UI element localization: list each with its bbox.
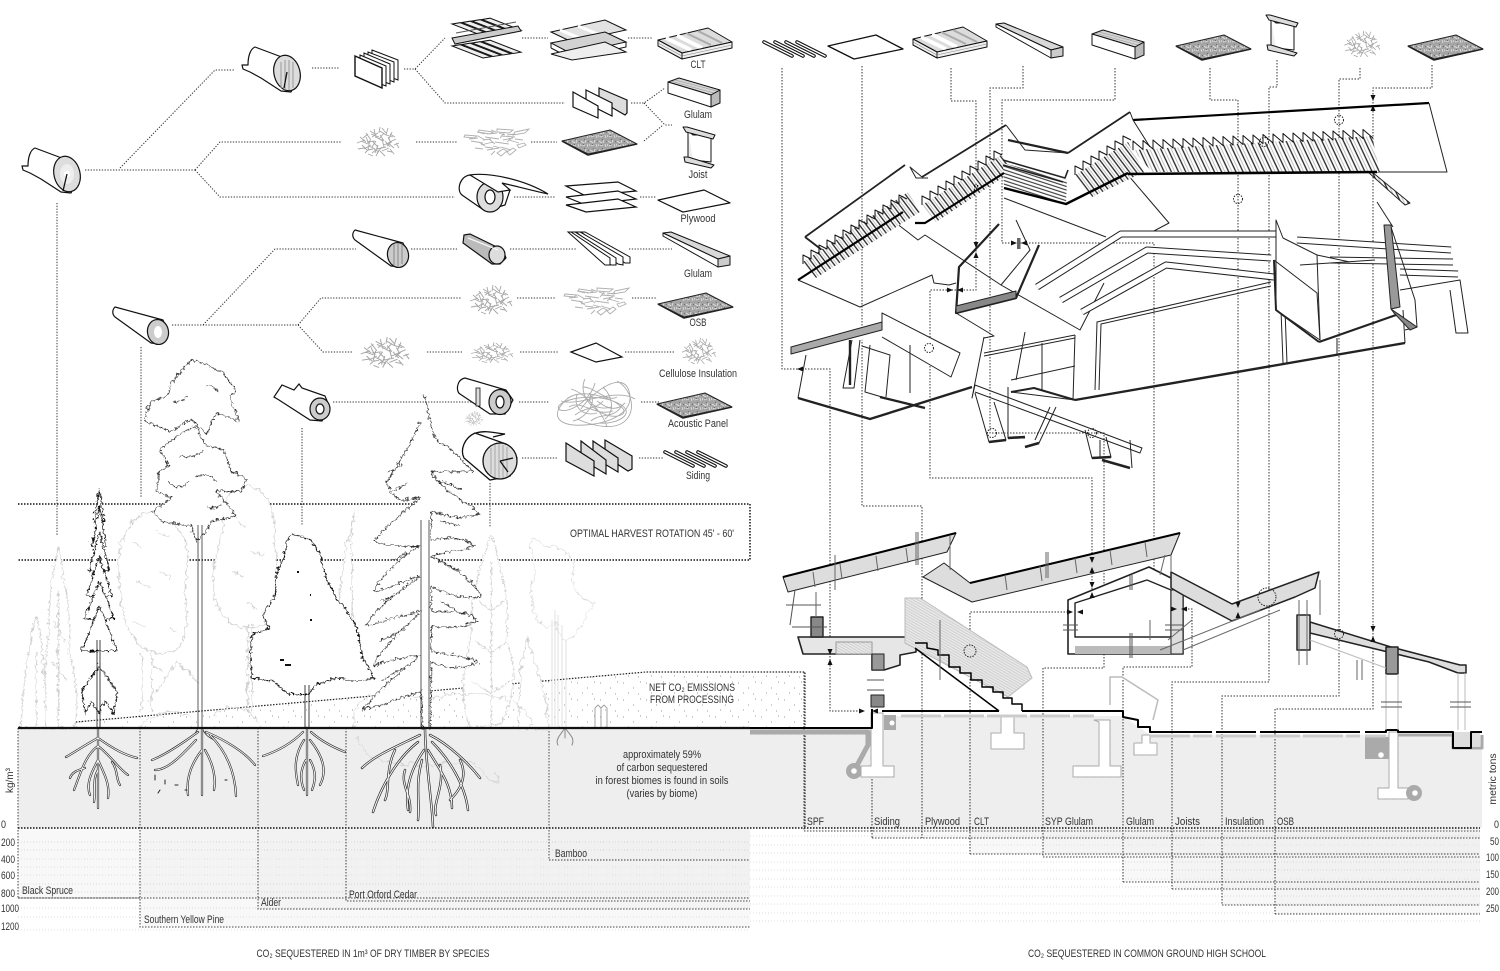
chart: CO2 sequestered by species [1,728,750,933]
material labels: SYP Glulam [1045,816,1093,828]
shrubs [135,692,530,781]
icon: log D [113,307,171,346]
tree: Southern Yellow Pine [143,359,245,740]
icon: CLT panel [658,28,732,59]
soil band [18,716,1482,828]
icon: siding strips [665,452,726,466]
y axis: metric tons [1487,753,1499,805]
detail markers [964,588,1344,657]
icon: plywood [828,35,903,59]
icon: glulam block [668,78,720,107]
icon: cellulose [682,338,716,364]
vertical members [816,535,1362,680]
tree: faint spruces [20,545,75,727]
roof deck top [805,103,1447,250]
stair [915,643,1022,711]
icon: log F [457,378,513,414]
species labels: Southern Yellow Pine [144,914,224,926]
icon: long glulam [663,232,730,267]
icon: siding boards [566,440,632,476]
y axis: 200 [1,837,15,849]
entry canopy [1110,677,1158,720]
y axis: 0 [1,819,6,831]
roots: bamboo [557,728,573,745]
label: Glulam: Glulam [684,268,712,280]
background trees [20,484,607,781]
flow lines: materials to building [782,60,1432,914]
stair and braces [975,385,1142,468]
icon: OSB sheet [562,130,637,155]
icon: joist [1266,15,1298,56]
y axis [1,767,19,933]
species labels: Bamboo [555,848,587,860]
icon: OSB [1408,35,1483,60]
icon: veneer log [459,174,548,212]
material labels: OSB [1277,816,1294,828]
material labels: CLT [974,816,989,828]
icon: OSB sheet [658,293,733,318]
label: Glulam: Glulam [684,109,712,121]
y axis [1486,753,1499,915]
icon: wood flakes [464,129,529,156]
species labels: Black Spruce [22,885,73,897]
label: Joist: Joist [688,169,708,181]
roots: Alder [263,728,345,795]
icon: sawn slabs [355,50,398,88]
arrows [797,95,1376,372]
label: Acoustic Panel: Acoustic Panel [668,418,728,430]
harvest rotation band [18,504,750,560]
icon: OSB [1176,35,1251,60]
net CO2 emissions area [19,672,805,828]
tree: faint cedar [335,510,546,727]
icon: plywood [658,190,730,212]
net CO2 emissions area: NET CO₂ EMISSIONS [649,682,735,694]
exploded axonometric [791,95,1468,468]
tree: Alder [249,533,373,727]
soil note [596,749,729,800]
icon: wood chips [357,127,399,156]
material labels: Joists [1175,816,1200,828]
tree: faint broadleaf right [211,484,276,710]
icon: siding [764,42,825,56]
lower section block [786,590,916,707]
roof section 1 [783,532,956,592]
ground line [750,709,1482,748]
tree: Black Spruce [80,488,116,727]
roots: Black Spruce [66,728,137,808]
arrows [828,557,1376,714]
end panels [1274,202,1417,342]
soil note: in forest biomes is found in soils [596,775,729,787]
label: Cellulose Insulation: Cellulose Insulation [659,368,737,380]
tree: faint broadleaf left [117,510,196,710]
material labels: SPF [807,816,824,828]
icon: joist [683,127,715,168]
icon: CLT layers [551,20,626,60]
rafters [798,130,1410,280]
y axis: 600 [1,870,15,882]
label: Plywood: Plywood [680,213,716,225]
icon: chips [361,337,409,368]
harvest rotation band: OPTIMAL HARVEST ROTATION 45' - 60' [570,528,734,540]
icon: log B hatched [242,47,304,94]
roots: Southern Yellow Pine [152,728,255,796]
icon: chips small [471,342,513,363]
left ground line [18,727,750,729]
tree: Port Orford Cedar [362,393,480,727]
icon: log C [353,230,411,269]
zero line [18,827,1480,829]
material labels: Glulam [1126,816,1154,828]
building section [750,532,1482,801]
y axis: 1200 [1,921,19,933]
chart: CO2 sequestered in building [750,753,1499,921]
y axis: 0 [1494,819,1499,831]
caption: right: CO₂ SEQUESTERED IN COMMON GROUND HIGH SCHOOL [1028,948,1266,960]
y axis: 800 [1,888,15,900]
label: OSB: OSB [690,317,706,329]
roof section 4 [1297,615,1471,730]
soil note: of carbon sequestered [616,762,708,774]
footings and drains [750,713,1482,801]
icon: log E [274,384,330,421]
material labels: Siding [874,816,900,828]
y axis: kg/m³ [5,767,16,793]
icon: wood chips [470,285,512,314]
icon: fibre tangle [557,379,635,427]
icon: squared log [463,234,506,264]
materials row [764,15,1483,60]
tree: faint conifer [462,533,512,727]
flow lines: wood processing [57,38,675,535]
net CO2 emissions area: FROM PROCESSING [650,694,734,706]
icon: wood flakes [564,288,629,315]
soil note: (varies by biome) [626,788,698,800]
bars [18,728,750,930]
middle plane [798,175,1169,338]
roof section 3 [1171,572,1319,621]
material labels: Plywood [925,816,960,828]
icon: long boards [568,232,630,265]
panel: timber processing diagram [22,18,737,482]
gable section [1063,567,1183,658]
icon: small chips [465,411,483,426]
icon: plies [566,182,636,212]
icon: CLT boards exploded [452,18,521,58]
species labels: Port Orford Cedar [349,889,417,901]
label: Siding: Siding [686,470,710,482]
tree: bamboo [529,535,592,727]
detail markers [924,116,1344,438]
icon: lamellas [573,88,627,118]
soil note: approximately 59% [623,749,701,761]
icon: paper sheet [571,343,622,362]
label: CLT: CLT [690,59,706,71]
glulam beams [1037,234,1468,333]
species labels: Alder [261,897,281,909]
icon: CLT [913,27,987,58]
y axis: 400 [1,854,15,866]
figures [595,705,607,727]
ground floor walls [791,282,1405,419]
icon: glulam [1092,30,1144,59]
tree roots [66,728,573,827]
icon: insulation [1344,31,1380,57]
icon: SYP glulam [996,23,1063,58]
material labels [807,816,1294,828]
bars [750,828,1480,921]
roof section 2 [923,533,1180,602]
material labels: Insulation [1225,816,1264,828]
icon: acoustic panel [657,393,732,418]
icon: log G [462,432,517,480]
icon: log A [22,148,84,195]
roots: Port Orford Cedar [362,728,480,827]
caption: left: CO₂ SEQUESTERED IN 1m³ OF DRY TIMBER BY SPECIES [256,948,490,960]
y axis: 1000 [1,903,19,915]
stair plate [905,598,1032,697]
species labels [22,848,587,926]
gable frame [956,224,1039,313]
